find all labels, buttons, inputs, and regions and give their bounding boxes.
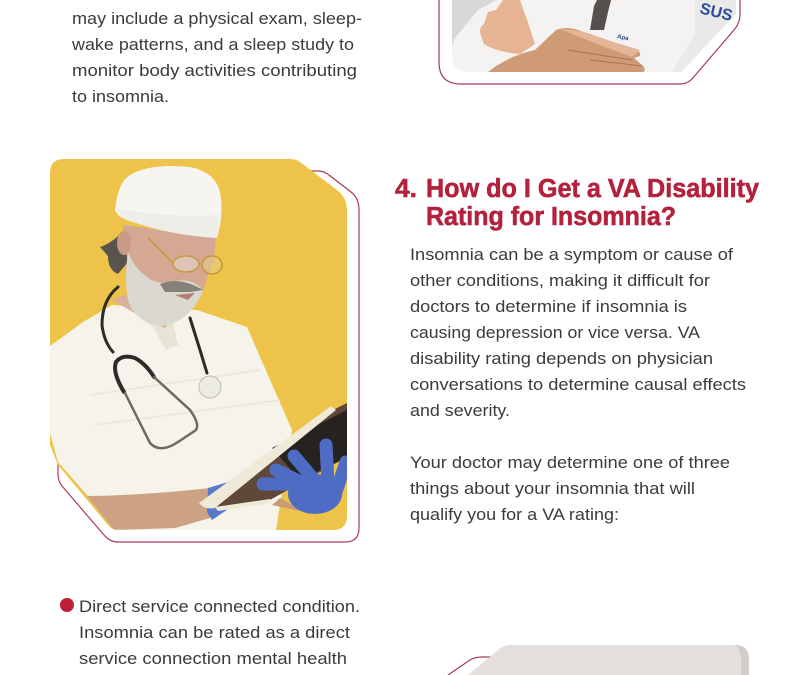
text block: three determinations intro	[410, 453, 730, 524]
image panel: bottom photo	[448, 645, 750, 675]
tablet	[215, 403, 347, 507]
text block: three determinations intro: Your doctor may determine one of three	[410, 453, 730, 472]
photo: white coat and hands	[452, 0, 742, 75]
text block: exam description: wake patterns, and a sleep study to	[71, 35, 354, 54]
arm	[87, 488, 210, 530]
neck	[112, 294, 168, 328]
glasses	[148, 238, 222, 274]
coat	[50, 305, 292, 530]
text block: insomnia rating explanation: disability rating depends on physician	[410, 349, 713, 368]
text block: exam description: monitor body activities contributing	[72, 61, 357, 80]
wrist	[272, 498, 302, 512]
image panel: doctor reading tablet	[50, 159, 359, 542]
photo: doctor on yellow background	[50, 159, 347, 530]
text block: three determinations intro: qualify you for a VA rating:	[410, 505, 619, 524]
text block: insomnia rating explanation: causing depression or vice versa. VA	[410, 323, 701, 342]
bullet: direct service connected condition: Insomnia can be rated as a direct	[79, 623, 350, 642]
glove behind tablet	[207, 482, 228, 520]
image outline	[448, 657, 492, 675]
photo: light background	[460, 645, 750, 675]
cap	[115, 166, 221, 238]
text block: exam description: may include a physical exam, sleep-	[72, 9, 362, 28]
bullet: direct service connected condition	[60, 597, 360, 668]
text block: insomnia rating explanation	[410, 245, 746, 420]
hair	[100, 232, 128, 274]
photo: white coat and hands: SUS	[698, 0, 734, 25]
heading: question 4: How do I Get a VA Disability	[426, 175, 760, 203]
heading: question 4: Rating for Insomnia?	[426, 203, 676, 231]
text block: three determinations intro: things about your insomnia that will	[410, 479, 695, 498]
image panel: doctor with crossed arms	[439, 0, 742, 84]
heading: question 4	[395, 175, 760, 231]
heading: question 4: 4.	[395, 175, 417, 203]
text block: insomnia rating explanation: and severity.	[410, 401, 510, 420]
icon: red bullet	[60, 598, 74, 612]
text block: exam description	[71, 9, 362, 106]
stethoscope	[102, 287, 207, 448]
text block: exam description: to insomnia.	[72, 87, 169, 106]
text block: insomnia rating explanation: doctors to determine if insomnia is	[410, 297, 687, 316]
bullet: direct service connected condition: service connection mental health	[79, 649, 347, 668]
bullet: direct service connected condition: Direct service connected condition.	[79, 597, 360, 616]
text block: insomnia rating explanation: conversations to determine causal effects	[410, 375, 746, 394]
blue glove	[263, 445, 346, 492]
image outline	[58, 171, 359, 542]
text block: insomnia rating explanation: other conditions, making it difficult for	[410, 271, 710, 290]
text block: insomnia rating explanation: Insomnia can be a symptom or cause of	[410, 245, 733, 264]
beard	[126, 252, 203, 326]
face	[123, 225, 216, 292]
photo: white coat and hands: Apa	[617, 34, 630, 42]
image outline	[439, 0, 740, 84]
